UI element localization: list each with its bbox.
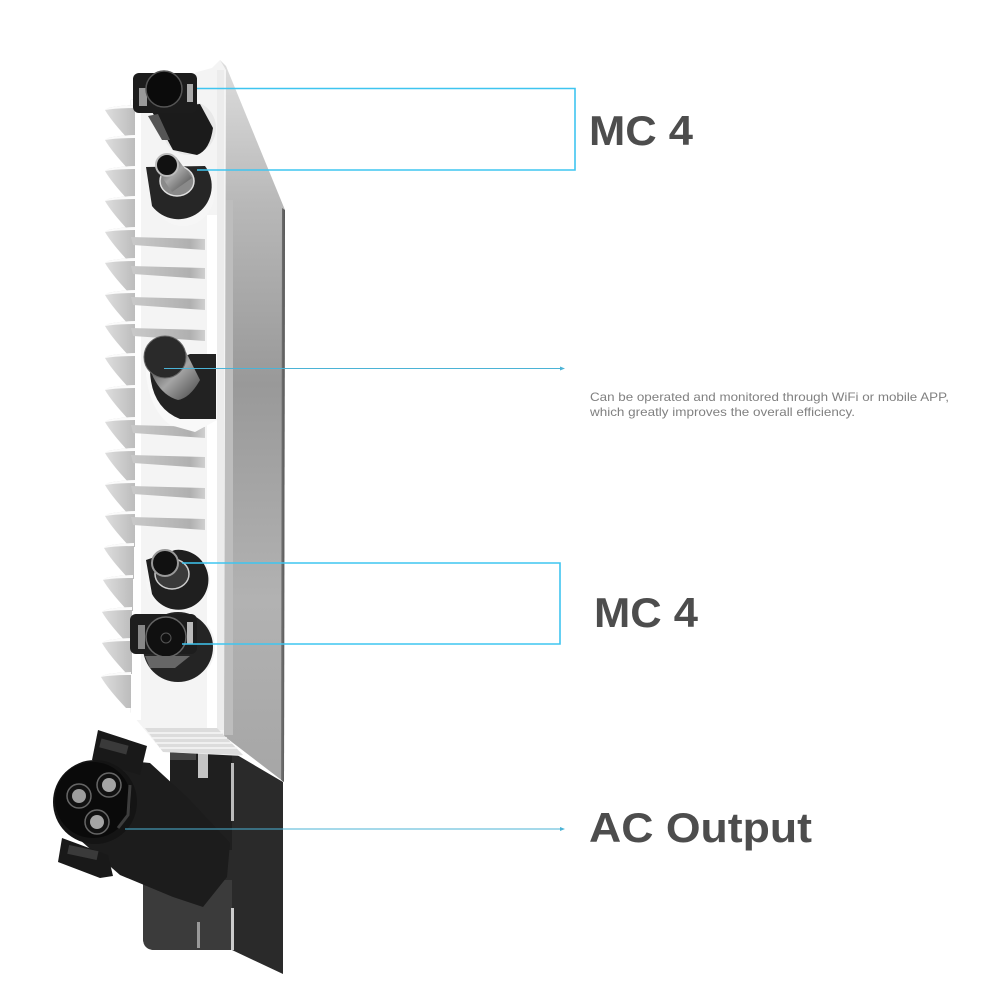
connector: MC4 top male xyxy=(146,154,214,226)
label: lower MC 4: MC 4 xyxy=(594,589,699,636)
description text: which greatly improves the overall efficiency. xyxy=(589,405,855,419)
leader bracket: upper MC4 xyxy=(197,88,575,170)
front face xyxy=(130,60,243,756)
connector: MC4 lower male xyxy=(146,548,210,612)
connector: MC4 top female xyxy=(133,71,216,155)
cooling fins xyxy=(101,105,205,708)
label: upper MC 4: MC 4 xyxy=(589,107,694,154)
bracket plate xyxy=(143,752,283,974)
leader bracket: lower MC4 xyxy=(182,563,560,644)
leader line: AC output xyxy=(125,827,565,831)
label: AC Output: AC Output xyxy=(589,804,812,851)
inverter device xyxy=(53,60,285,974)
description text: Can be operated and monitored through WiFi or mobile APP, xyxy=(590,390,949,404)
connector: center cap xyxy=(144,336,217,432)
side panel xyxy=(220,60,285,782)
connector: MC4 lower female xyxy=(130,610,215,684)
connector: AC output xyxy=(53,730,230,907)
leader line: center callout xyxy=(164,366,565,370)
